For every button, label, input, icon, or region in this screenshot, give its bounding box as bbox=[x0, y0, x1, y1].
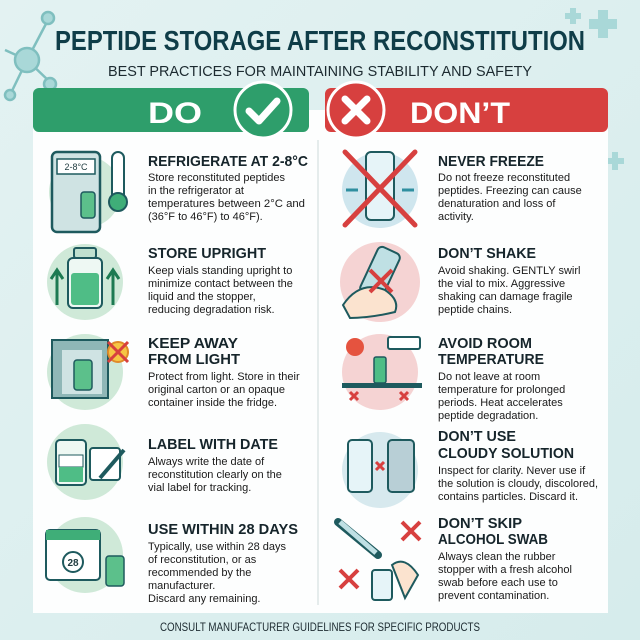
text: label bbox=[148, 436, 282, 494]
text: swab bbox=[438, 515, 572, 602]
text: shake: DON’T SHAKE bbox=[438, 245, 536, 262]
text: label: Always write the date of bbox=[148, 456, 265, 468]
text: 28 days: of reconstitution, or as bbox=[148, 554, 257, 566]
text: room temp: peptide degradation. bbox=[438, 410, 538, 422]
icon: fridge: 2-8°C bbox=[64, 162, 88, 172]
text: shake: the vial to mix. Aggressive bbox=[438, 278, 565, 290]
text: freeze: activity. bbox=[438, 211, 474, 223]
text: cloudy: DON’T USE bbox=[438, 428, 516, 445]
text: swab: DON’T SKIP bbox=[438, 515, 522, 532]
icon: clear vs cloudy vials bbox=[342, 432, 418, 508]
text: shake bbox=[438, 245, 580, 316]
text: cloudy bbox=[438, 428, 598, 503]
text: freeze bbox=[438, 153, 582, 223]
text: 28 days: Discard any remaining. bbox=[148, 593, 260, 605]
subtitle: BEST PRACTICES FOR MAINTAINING STABILITY AND SAFETY bbox=[108, 63, 532, 80]
text: room temp: temperature for prolonged bbox=[438, 384, 565, 396]
icon: box with sun bbox=[47, 334, 128, 410]
DO row 2: upright bbox=[47, 244, 293, 320]
text: 28 days bbox=[148, 521, 298, 605]
icon: calendar 28 bbox=[46, 517, 124, 593]
text: shake: peptide chains. bbox=[438, 304, 512, 316]
white card bbox=[33, 110, 608, 613]
text: cloudy: the solution is cloudy, discolored, bbox=[438, 478, 598, 490]
text: swab: Always clean the rubber bbox=[438, 551, 556, 563]
header: DO: DO bbox=[148, 97, 202, 130]
text: refrigerate: (36°F to 46°F) to 46°F). bbox=[148, 211, 263, 223]
text: room temp: periods. Heat accelerates bbox=[438, 397, 563, 409]
icon: upright vial bbox=[47, 244, 123, 320]
DONT row 4: cloudy bbox=[342, 428, 598, 508]
text: 28 days: manufacturer. bbox=[148, 580, 215, 592]
text: room temp: AVOID ROOM bbox=[438, 335, 532, 352]
icon: syringe and swab bbox=[338, 522, 420, 600]
text: swab: ALCOHOL SWAB bbox=[438, 531, 548, 548]
icon: hand shaking bbox=[340, 242, 420, 322]
footer: CONSULT MANUFACTURER GUIDELINES FOR SPECIFIC PRODUCTS bbox=[160, 622, 480, 634]
text: room temp bbox=[438, 335, 565, 422]
text: light: original carton or an opaque bbox=[148, 384, 285, 396]
text: 28 days: USE WITHIN 28 DAYS bbox=[148, 521, 298, 538]
text: refrigerate bbox=[148, 153, 308, 223]
text: room temp: TEMPERATURE bbox=[438, 351, 544, 368]
text: upright: liquid and the stopper, bbox=[148, 291, 256, 303]
text: refrigerate: in the refrigerator at bbox=[148, 185, 244, 197]
text: swab: stopper with a fresh alcohol bbox=[438, 564, 572, 576]
DONT row 5: swab bbox=[338, 515, 572, 602]
icon: fridge bbox=[49, 152, 127, 232]
text: refrigerate: temperatures between 2°C and bbox=[148, 198, 305, 210]
text: refrigerate: REFRIGERATE AT 2-8°C bbox=[148, 153, 308, 170]
icon: sun, heater, desk bbox=[342, 334, 422, 410]
text: upright: Keep vials standing upright to bbox=[148, 265, 292, 277]
text: light: KEEP AWAY bbox=[148, 335, 238, 352]
header: DON'T: DON’T bbox=[410, 97, 510, 130]
DO row 5: 28 days bbox=[46, 517, 298, 605]
text: freeze: NEVER FREEZE bbox=[438, 153, 544, 170]
header: DON'T bbox=[325, 82, 608, 138]
text: upright: STORE UPRIGHT bbox=[148, 245, 266, 262]
decoration: crosses bbox=[565, 8, 624, 170]
text: freeze: Do not freeze reconstituted bbox=[438, 172, 570, 184]
DO row 3: light bbox=[47, 334, 300, 410]
text: light: FROM LIGHT bbox=[148, 351, 240, 368]
text: freeze: denaturation and loss of bbox=[438, 198, 556, 210]
text: label: reconstitution clearly on the bbox=[148, 469, 282, 481]
text: room temp: Do not leave at room bbox=[438, 371, 540, 383]
text: upright: reducing degradation risk. bbox=[148, 304, 275, 316]
icon: vial and calendar bbox=[47, 424, 124, 500]
DONT row 2: shake bbox=[340, 242, 580, 322]
header: DO bbox=[33, 82, 309, 138]
text: cloudy: CLOUDY SOLUTION bbox=[438, 445, 574, 462]
text: swab: swab before each use to bbox=[438, 577, 558, 589]
text: shake: Avoid shaking. GENTLY swirl bbox=[438, 265, 580, 277]
text: cloudy: Inspect for clarity. Never use if bbox=[438, 465, 586, 477]
text: light: Protect from light. Store in their bbox=[148, 371, 300, 383]
icon: frozen vial bbox=[342, 152, 418, 228]
text: upright: minimize contact between the bbox=[148, 278, 293, 290]
DONT row 3: room temp bbox=[342, 334, 565, 422]
text: label: vial label for tracking. bbox=[148, 482, 251, 494]
text: label: LABEL WITH DATE bbox=[148, 436, 278, 453]
text: light: container inside the fridge. bbox=[148, 397, 277, 409]
text: light bbox=[148, 335, 300, 409]
text: 28 days: Typically, use within 28 days bbox=[148, 541, 286, 553]
text: freeze: peptides. Freezing can cause bbox=[438, 185, 582, 197]
DO row 1: refrigerate bbox=[49, 152, 308, 232]
DO row 4: label bbox=[47, 424, 282, 500]
text: refrigerate: Store reconstituted peptides bbox=[148, 172, 285, 184]
text: cloudy: contains particles. Discard it. bbox=[438, 491, 578, 503]
text: 28 days: recommended by the bbox=[148, 567, 251, 579]
icon: calendar 28: 28 bbox=[67, 558, 79, 569]
DONT row 1: freeze bbox=[342, 152, 582, 228]
text: swab: prevent contamination. bbox=[438, 590, 549, 602]
text: shake: shaking can damage fragile bbox=[438, 291, 573, 303]
text: upright bbox=[148, 245, 293, 316]
decoration: molecule bbox=[5, 12, 56, 100]
